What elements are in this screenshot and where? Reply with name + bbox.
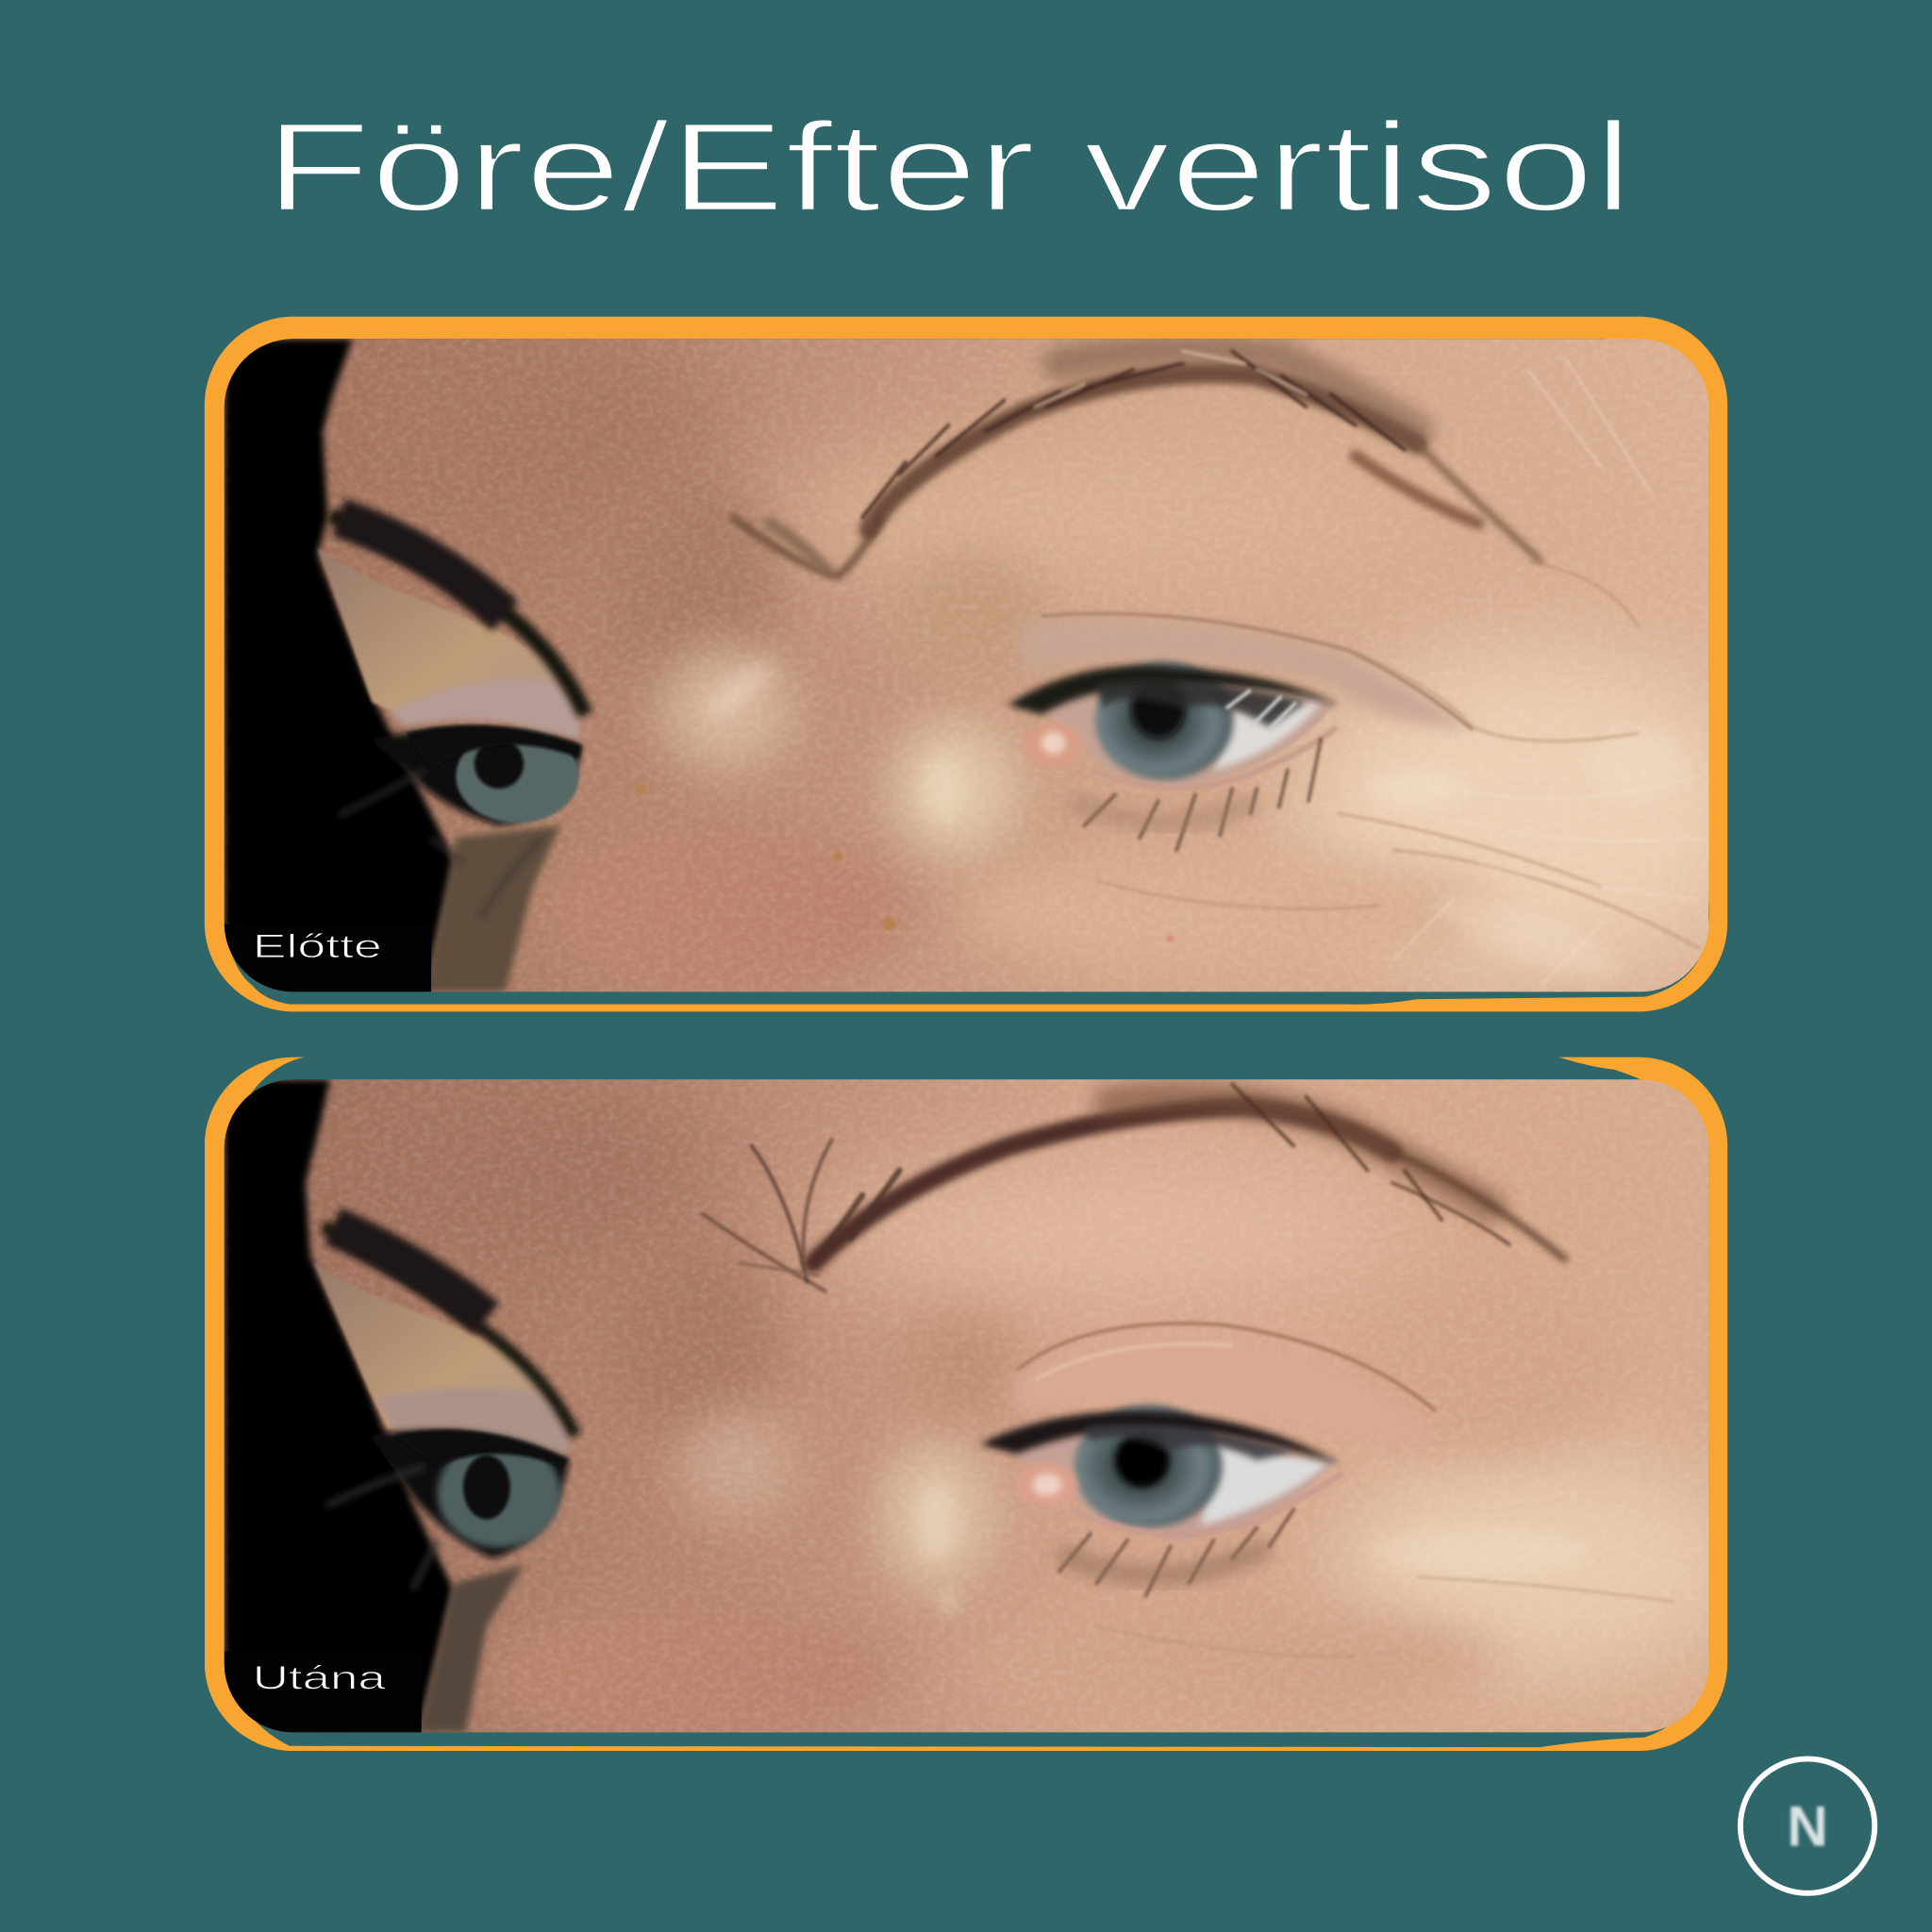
skin tone map: [345, 1072, 1750, 1750]
near brow: [733, 349, 1541, 576]
near eye: [979, 1405, 1343, 1541]
label: after: Utána: [253, 1660, 386, 1697]
panel: before photo with frame: [205, 317, 1762, 1011]
specular highlights: [699, 654, 1688, 993]
logo: N badge: N: [1787, 1795, 1828, 1858]
far eye: [370, 728, 581, 825]
black cover for label: [225, 924, 431, 991]
far lid: [318, 548, 581, 740]
wrinkles: [1096, 560, 1700, 949]
orange frame: after: [205, 1056, 1727, 1751]
far lid pink: [388, 678, 579, 740]
far lid: [314, 1263, 569, 1460]
panel: after photo with frame: [205, 1056, 1750, 1751]
background black: [225, 339, 456, 991]
far brow: [330, 515, 585, 715]
wrinkles: [1096, 1577, 1675, 1657]
far cheek: [419, 1565, 524, 1732]
specular highlights: [917, 1482, 1590, 1613]
black cover for label: [225, 1651, 422, 1732]
far cheek: [425, 825, 560, 991]
brow hairs: [862, 351, 1405, 518]
light wrinkle lines: [1392, 358, 1700, 986]
background black: [225, 1079, 454, 1732]
far lashes: [326, 1466, 438, 1590]
label: before: Előtte: [253, 928, 382, 965]
orange frame: before: [205, 317, 1727, 1011]
near crease and lid: [1017, 1341, 1436, 1441]
skin texture: [225, 1079, 1709, 1732]
photo: eyes after treatment: [225, 1072, 1750, 1750]
far lashes: [339, 770, 542, 918]
far eye: [370, 1430, 569, 1558]
far brow: [323, 1226, 575, 1436]
freckles: [636, 784, 1174, 942]
lower lashes: [1059, 1509, 1293, 1595]
title: Före/Efter vertisol: [265, 95, 1633, 238]
near crease and lid: [1023, 620, 1473, 727]
near brow: [702, 1084, 1565, 1291]
near eye: [1008, 661, 1340, 787]
logo: N badge: [1740, 1758, 1874, 1893]
skin texture: [225, 339, 1709, 991]
skin tone map: [389, 339, 1709, 992]
photo: eyes before treatment: [225, 321, 1762, 998]
lower lashes: [1084, 740, 1321, 850]
far lid pink: [375, 1388, 569, 1454]
